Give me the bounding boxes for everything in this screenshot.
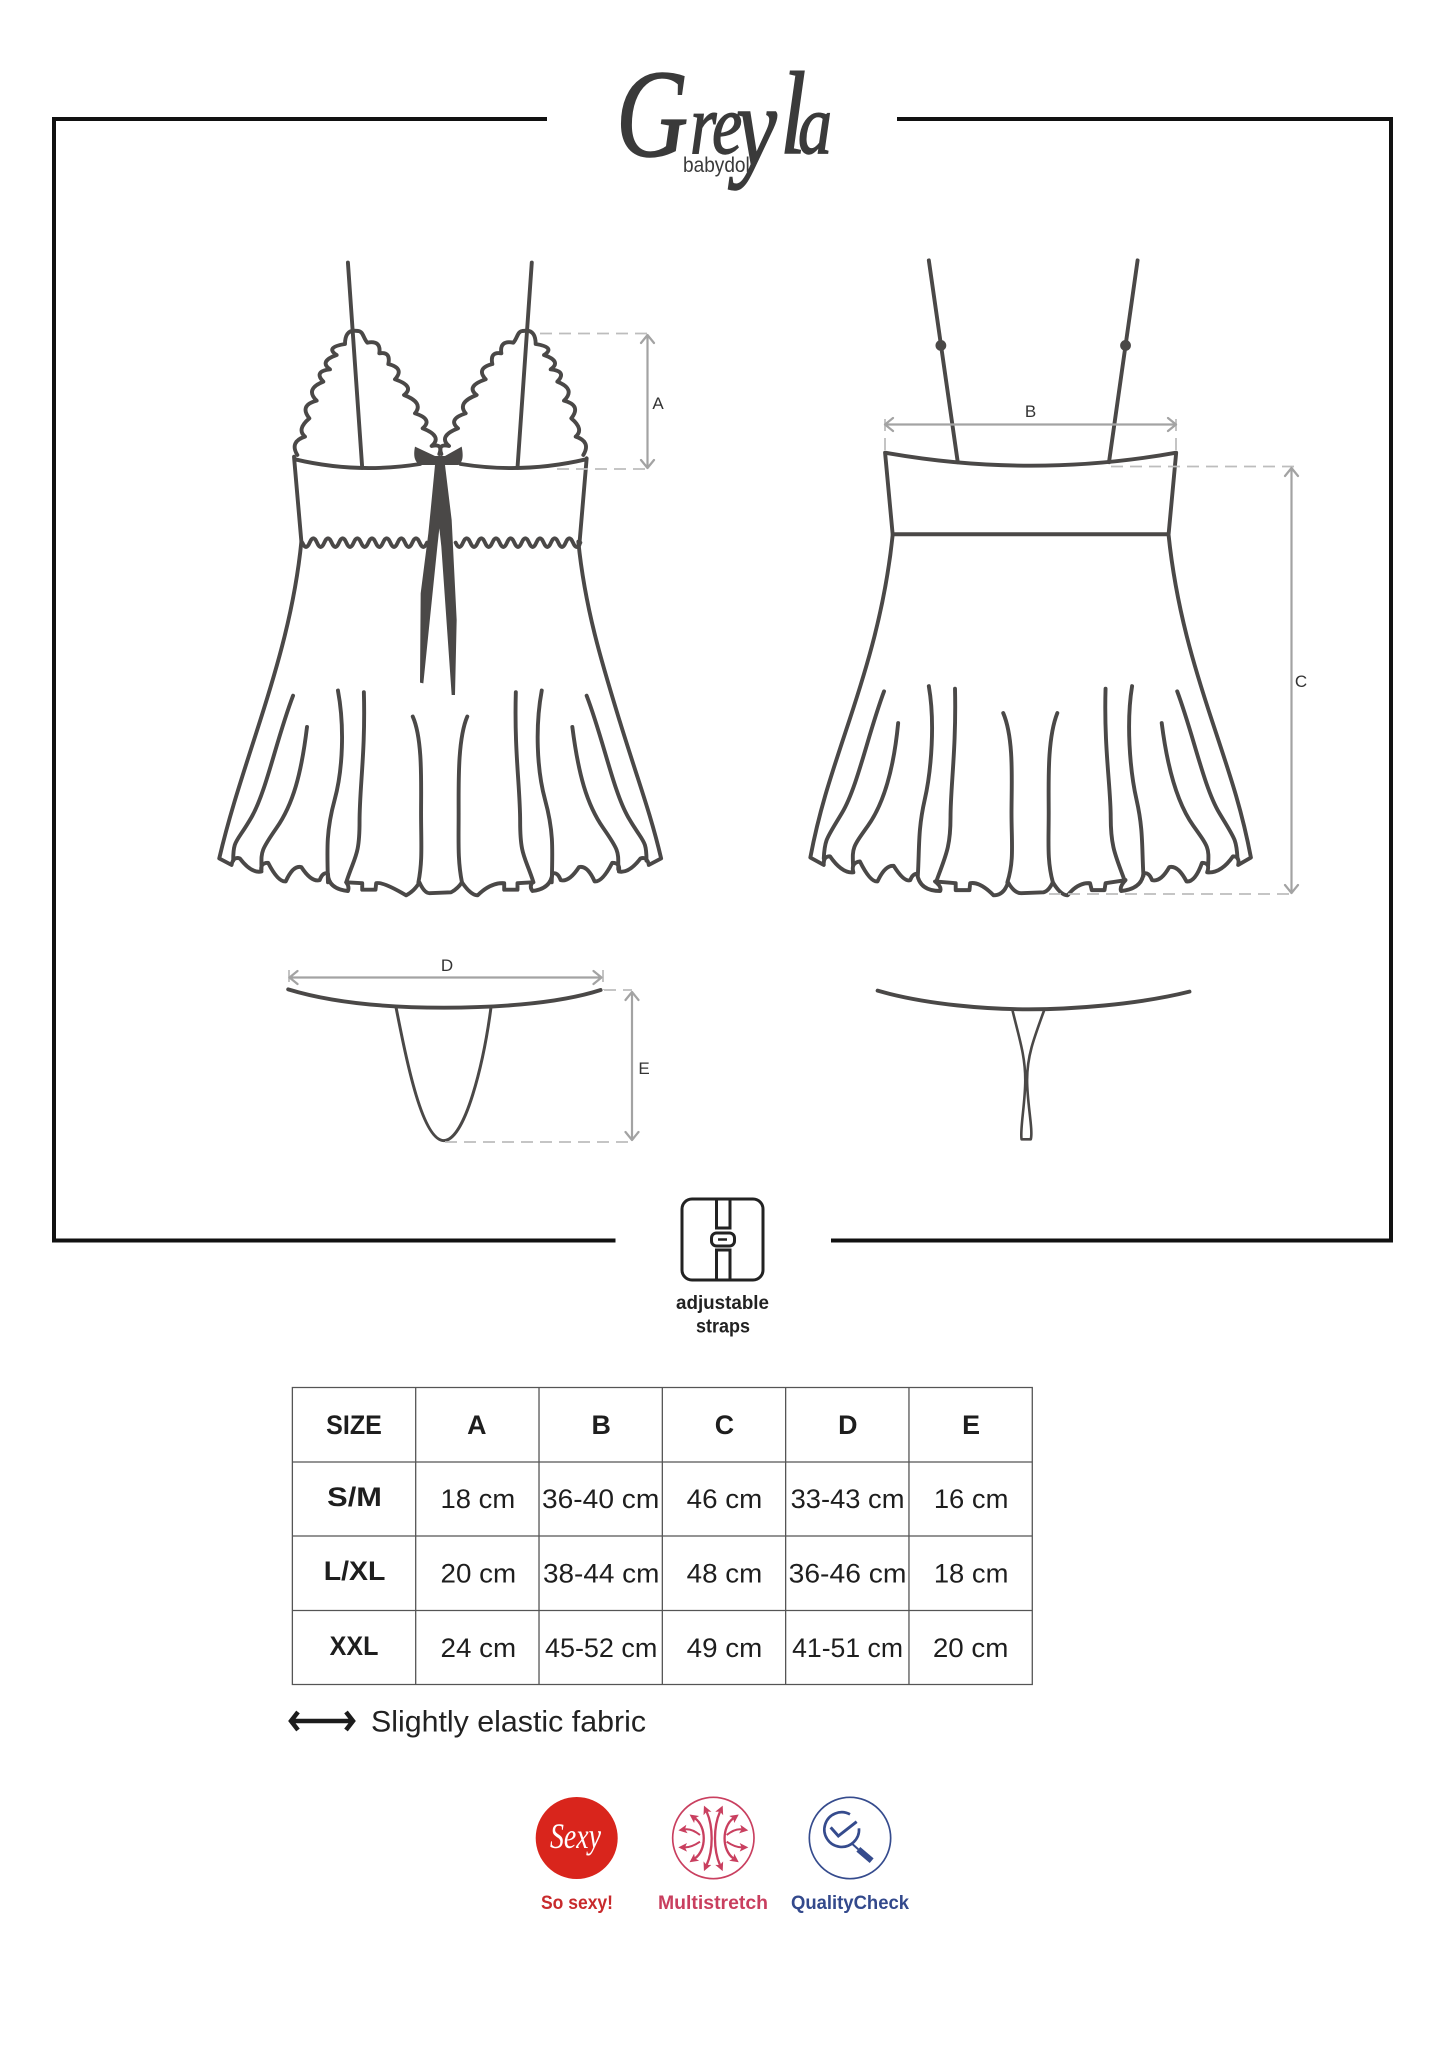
row XXL: 45-52 cm bbox=[545, 1633, 657, 1663]
header row: D bbox=[838, 1410, 857, 1440]
left strap bbox=[348, 263, 362, 468]
row S/M: 18 cm bbox=[441, 1484, 515, 1514]
logo wordmark: r bbox=[690, 77, 717, 172]
row XXL: 49 cm bbox=[687, 1633, 762, 1663]
row L/XL: 48 cm bbox=[687, 1558, 762, 1589]
dimension B: B bbox=[1025, 402, 1036, 421]
scalloped waist right bbox=[456, 538, 580, 547]
babydoll back drawing bbox=[810, 260, 1251, 895]
badge label: QualityCheck bbox=[791, 1893, 909, 1914]
row L/XL: 38-44 cm bbox=[543, 1558, 659, 1589]
red circle icon bbox=[536, 1797, 618, 1879]
size table bbox=[292, 1388, 1032, 1684]
logo: Greyla babydoll bbox=[616, 46, 832, 190]
adjustable straps caption bbox=[676, 1293, 769, 1338]
header row: B bbox=[591, 1410, 611, 1440]
string bbox=[1012, 1010, 1044, 1139]
icon: adjustable straps bbox=[682, 1199, 763, 1280]
magnifier icon bbox=[809, 1797, 891, 1879]
dimension E bbox=[445, 990, 650, 1142]
skirt and straps bbox=[219, 263, 661, 895]
frame bbox=[54, 119, 1391, 1240]
waistband bbox=[288, 989, 601, 1008]
logo wordmark: a bbox=[798, 77, 832, 172]
row L/XL: 36-46 cm bbox=[789, 1558, 906, 1589]
badge: multistretch bbox=[658, 1797, 768, 1914]
dimension A: A bbox=[652, 394, 664, 413]
dimension D bbox=[289, 956, 603, 990]
row XXL bbox=[330, 1631, 1008, 1663]
row XXL: 24 cm bbox=[441, 1633, 516, 1663]
adjustable straps caption: straps bbox=[696, 1316, 750, 1338]
dimension D: D bbox=[441, 956, 453, 975]
scalloped waist left bbox=[302, 538, 427, 547]
header row: SIZE bbox=[326, 1410, 382, 1440]
row L/XL: L/XL bbox=[324, 1556, 385, 1586]
bow and ribbon tails bbox=[414, 447, 463, 695]
logo wordmark: y bbox=[728, 62, 778, 190]
dimension C bbox=[1049, 466, 1307, 894]
icon: double arrow bbox=[291, 1712, 353, 1730]
dimension C: C bbox=[1295, 672, 1307, 691]
row S/M: 36-40 cm bbox=[542, 1484, 659, 1514]
sexy script: Sexy bbox=[550, 1816, 601, 1856]
badge label: Multistretch bbox=[658, 1893, 768, 1914]
right strap bbox=[517, 263, 532, 468]
thong front drawing bbox=[288, 989, 601, 1141]
waistband bbox=[878, 991, 1189, 1009]
header row: C bbox=[715, 1410, 734, 1440]
header row: A bbox=[467, 1410, 487, 1440]
row XXL: 20 cm bbox=[933, 1633, 1008, 1663]
stretch arrows icon bbox=[673, 1797, 754, 1879]
right cup scalloped edge bbox=[440, 331, 586, 455]
bodice band bbox=[885, 453, 1176, 534]
row L/XL bbox=[324, 1556, 1008, 1589]
elastic fabric note bbox=[291, 1706, 646, 1738]
row XXL: 41-51 cm bbox=[792, 1633, 903, 1663]
badge: quality check bbox=[791, 1797, 909, 1914]
row L/XL: 18 cm bbox=[934, 1558, 1008, 1589]
thong back drawing bbox=[878, 991, 1189, 1139]
left cup scalloped edge bbox=[295, 331, 440, 455]
row S/M: 33-43 cm bbox=[791, 1484, 904, 1514]
bodice and cups bbox=[294, 331, 587, 547]
row S/M: S/M bbox=[327, 1482, 382, 1512]
dimension A bbox=[540, 334, 664, 469]
logo wordmark: G bbox=[616, 46, 688, 184]
note text: Slightly elastic fabric bbox=[371, 1706, 646, 1738]
badge: so sexy bbox=[536, 1797, 618, 1914]
row S/M bbox=[327, 1482, 1008, 1514]
row S/M: 16 cm bbox=[934, 1484, 1008, 1514]
babydoll front drawing bbox=[219, 263, 661, 895]
adjustable straps caption: adjustable bbox=[676, 1293, 769, 1314]
strap sliders bbox=[937, 342, 1129, 349]
header row: E bbox=[962, 1410, 980, 1440]
header row bbox=[326, 1410, 980, 1440]
bodice band bbox=[294, 457, 587, 545]
row S/M: 46 cm bbox=[687, 1484, 762, 1514]
skirt folds bbox=[824, 686, 1237, 882]
dimension B bbox=[885, 402, 1176, 450]
logo subtitle: babydoll bbox=[683, 154, 754, 177]
straps bbox=[929, 260, 1138, 462]
table grid bbox=[292, 1388, 1032, 1684]
dimension E: E bbox=[638, 1059, 650, 1078]
badge label: So sexy! bbox=[541, 1893, 613, 1914]
logo wordmark: e bbox=[712, 77, 742, 172]
pouch bbox=[396, 1007, 491, 1141]
logo wordmark: l bbox=[780, 49, 806, 180]
row XXL: XXL bbox=[330, 1631, 378, 1661]
skirt outline and ruffled hem bbox=[219, 542, 661, 895]
skirt outline and ruffled hem bbox=[810, 535, 1251, 895]
row L/XL: 20 cm bbox=[441, 1558, 516, 1589]
skirt folds bbox=[233, 690, 646, 882]
